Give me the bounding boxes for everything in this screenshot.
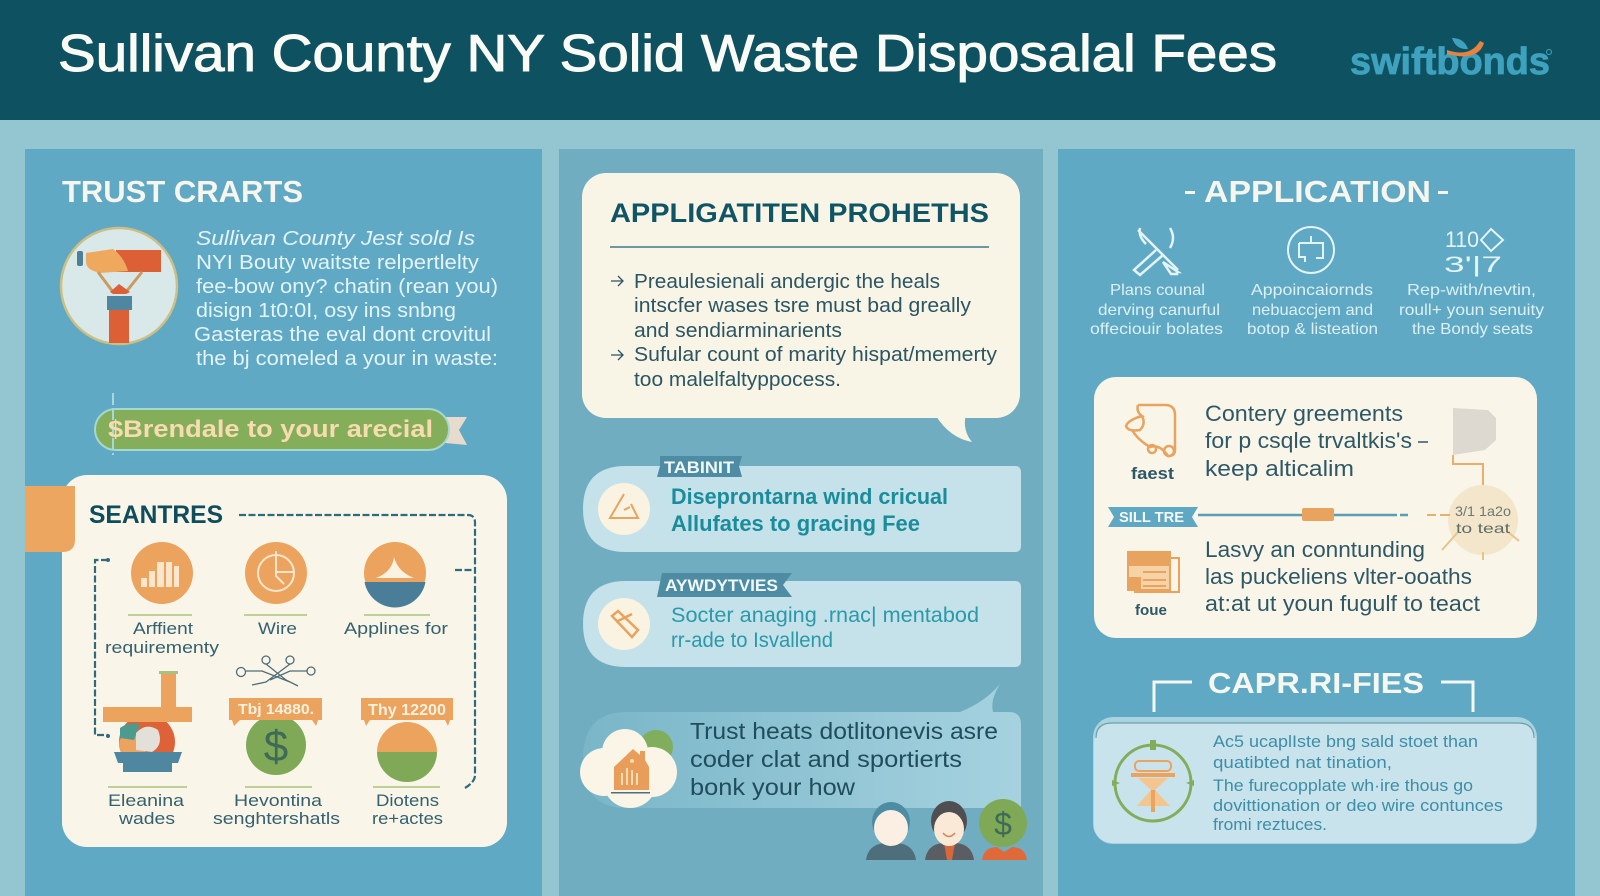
intro text	[194, 228, 498, 370]
icon: green ring hourglass	[1112, 740, 1194, 821]
callout: trust heats bubble: Trust heats dotlitonevis asre	[690, 718, 998, 744]
icon: numbers	[1444, 227, 1503, 277]
column text: Plans counal	[1110, 282, 1205, 299]
heading: TRUST CRARTS	[62, 174, 303, 209]
card: seantres	[25, 475, 507, 847]
column text: offeciouir bolates	[1090, 321, 1223, 338]
list text: intscfer wases tsre must bad greally	[634, 295, 971, 317]
intro text: the bj comeled a your in waste:	[196, 348, 498, 370]
text block 2: las puckeliens vlter-ooaths	[1205, 564, 1472, 589]
card: capr.ri-fies: dovittionation or deo wire contunces	[1213, 796, 1503, 815]
icon: tools	[1134, 228, 1178, 275]
heading: capr.ri-fies: CAPR.RI-FIES	[1208, 668, 1424, 700]
people and coin	[866, 799, 1027, 860]
labels row 2: Diotens	[376, 791, 439, 810]
callout: tabinit: Diseprontarna wind cricual	[671, 484, 948, 509]
speech card	[582, 173, 1020, 442]
labels row 2: senghtershatls	[213, 809, 340, 828]
card: agreements: foue	[1135, 602, 1167, 619]
column text: roull+ youn senuity	[1399, 302, 1544, 319]
column text: derving canurful	[1098, 302, 1220, 319]
labels row 1	[105, 615, 448, 657]
labels row 1: requirementy	[105, 638, 220, 657]
callout: aywdytvies: rr-ade to Isvallend	[671, 629, 833, 652]
icon: documents	[1128, 552, 1179, 592]
card: capr.ri-fies: quatibted nat tination,	[1213, 753, 1392, 772]
tag: Thy 12200	[361, 698, 453, 782]
column text: the Bondy seats	[1412, 321, 1533, 338]
panel: application	[1058, 149, 1575, 896]
callout: tabinit: TABINIT	[664, 458, 735, 477]
callout: tabinit: Allufates to gracing Fee	[671, 511, 920, 536]
logo: swiftbonds: swiftbonds	[1350, 41, 1550, 83]
list text: and sendiarminarients	[634, 320, 842, 342]
list text: Sufular count of marity hispat/memerty	[634, 344, 997, 366]
panel: trust crarts	[25, 149, 542, 896]
card: capr.ri-fies	[1093, 717, 1537, 844]
column text: Appoincaiornds	[1251, 282, 1373, 299]
column text: nebuaccjem and	[1252, 302, 1373, 319]
text block 1: Contery greements	[1205, 401, 1403, 426]
text block 1: keep alticalim	[1205, 456, 1354, 481]
tag: Tbj 14880: $	[264, 722, 288, 771]
text block 1: for p csqle trvaltkis's	[1205, 428, 1412, 453]
callout: trust heats bubble: coder clat and sportierts	[690, 746, 962, 772]
icon: hand and pipe	[61, 228, 177, 344]
people and coin: $	[994, 806, 1012, 842]
callout: tabinit	[583, 456, 1021, 552]
labels row 1: Applines for	[344, 619, 448, 638]
heading: SEANTRES	[89, 501, 223, 529]
intro text: Gasteras the eval dont crovitul	[194, 324, 491, 346]
header banner	[0, 0, 1600, 120]
text block 2	[1205, 537, 1480, 616]
ribbon pill	[95, 393, 467, 455]
ribbon pill: $Brendale to your arecial	[108, 416, 433, 443]
text block 2: Lasvy an conntunding	[1205, 537, 1425, 562]
icon: cycle	[1288, 227, 1334, 273]
icon: tag	[598, 598, 650, 650]
card: agreements: faest	[1131, 464, 1174, 483]
icon: bag	[1126, 405, 1175, 456]
icon: numbers: 3'|7	[1444, 252, 1502, 277]
callout: trust heats bubble	[580, 684, 1021, 808]
icon: numbers: 110	[1445, 227, 1479, 252]
card: capr.ri-fies: fromi reztuces.	[1213, 815, 1327, 834]
labels row 1: Arffient	[133, 619, 193, 638]
heading: APPLICATION	[1204, 174, 1431, 209]
badge: to teat: to teat	[1456, 520, 1510, 536]
icon: bars	[131, 542, 193, 604]
icon: clock	[245, 542, 307, 604]
icon: ship on water	[364, 542, 426, 607]
badge: to teat	[1442, 485, 1519, 560]
timeline ribbon	[1108, 507, 1450, 527]
icon: cloud and house	[580, 729, 677, 808]
icon: triangle	[598, 483, 650, 535]
intro text: Sullivan County Jest sold Is	[196, 228, 475, 250]
heading: capr.ri-fies	[1154, 668, 1473, 712]
panel: application prohetths	[559, 149, 1043, 896]
icon: network	[236, 656, 315, 686]
labels row 2: Hevontina	[234, 791, 323, 810]
text block 1	[1205, 401, 1428, 481]
callout: aywdytvies: Socter anaging .rnac| mentabod	[671, 604, 979, 627]
card: capr.ri-fies: Ac5 ucaplIste bng sald stoet than	[1213, 732, 1478, 751]
card: agreements	[1094, 377, 1537, 638]
dashed connector	[95, 515, 475, 788]
labels row 2	[108, 787, 443, 828]
badge: to teat: 3/1 1a2o	[1455, 503, 1511, 519]
intro text: NYI Bouty waitste relpertlelty	[196, 252, 479, 274]
intro text: fee-bow ony? chatin (rean you)	[196, 276, 498, 298]
callout: trust heats bubble: bonk your how	[690, 774, 855, 800]
tag: Tbj 14880	[229, 698, 322, 775]
text block 2: at:at ut youn fugulf to teact	[1205, 591, 1480, 616]
list text	[611, 271, 997, 391]
timeline ribbon: SILL TRE	[1119, 509, 1184, 526]
icon: pipe over bowl	[103, 671, 192, 772]
column text: Rep-with/nevtin,	[1407, 282, 1536, 299]
labels row 1: Wire	[258, 619, 297, 638]
labels row 2: re+actes	[372, 809, 443, 828]
callout: aywdytvies: AYWDYTVIES	[665, 576, 778, 595]
title: Sullivan County NY Solid Waste Disposalal Fees	[58, 25, 1277, 83]
list text: too malelfaltyppocess.	[634, 369, 841, 391]
callout: aywdytvies	[583, 573, 1021, 667]
intro text: disign 1t0:0I, osy ins snbng	[196, 300, 456, 322]
list text: Preaulesienali andergic the heals	[634, 271, 940, 293]
heading: APPLIGATITEN PROHETHS	[610, 198, 989, 228]
labels row 2: wades	[118, 809, 175, 828]
tag: Thy 12200: Thy 12200	[368, 702, 446, 719]
labels row 2: Eleanina	[108, 791, 185, 810]
column text: botop & listeation	[1247, 321, 1378, 338]
card: capr.ri-fies: The furecopplate wh·ire thous go	[1213, 776, 1473, 795]
tag: Tbj 14880: Tbj 14880.	[238, 701, 314, 718]
icon: grey cup with connector	[1453, 408, 1496, 490]
column text	[1090, 282, 1544, 338]
